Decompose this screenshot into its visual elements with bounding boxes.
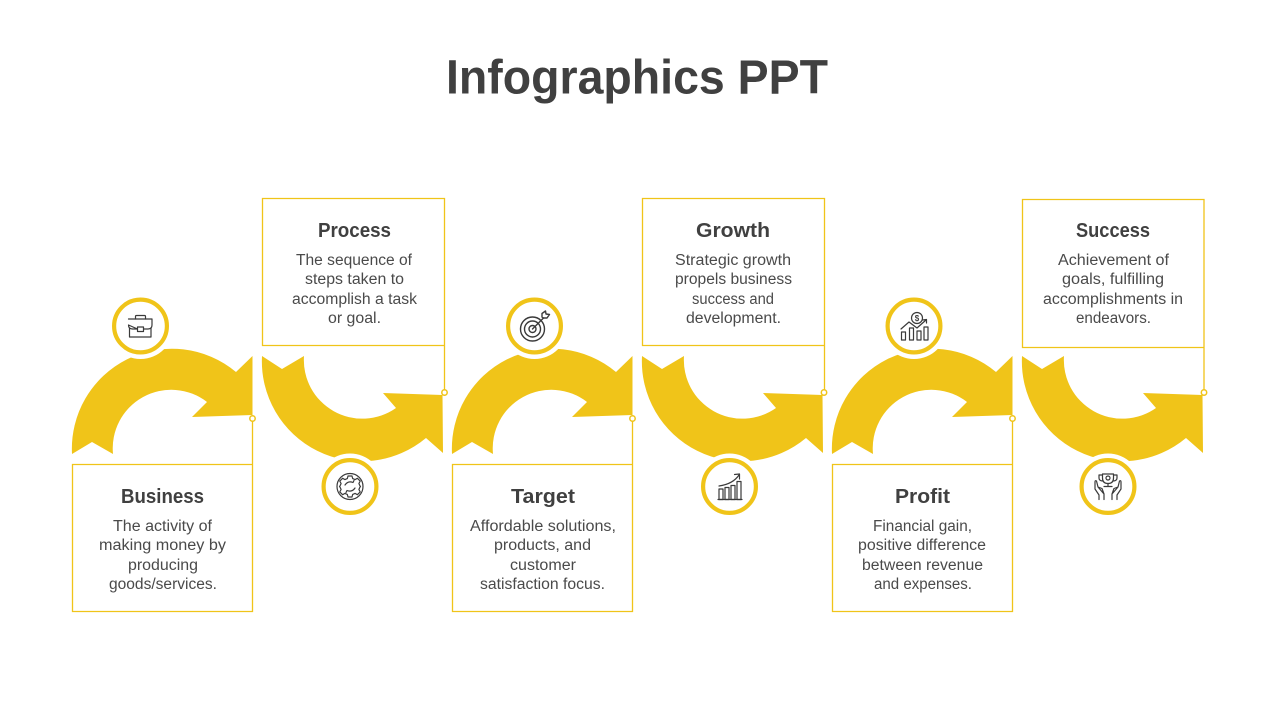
box with connector <box>72 418 252 612</box>
arrow: step 4 <box>642 356 823 461</box>
box with connector <box>452 418 632 612</box>
body text: customer <box>510 557 576 574</box>
body text: Strategic growth <box>675 252 791 269</box>
body text: development. <box>686 310 781 327</box>
body text: goods/services. <box>109 576 217 593</box>
body text: satisfaction focus. <box>480 576 605 593</box>
body text: between revenue <box>862 557 983 574</box>
icon: target <box>502 293 568 359</box>
body text: The activity of <box>113 518 213 535</box>
connector dot <box>442 390 447 395</box>
icon: hands with trophy <box>1075 454 1141 520</box>
heading: Process <box>318 220 391 242</box>
icon: profit chart: $ <box>915 314 920 323</box>
heading: Business <box>121 486 204 508</box>
connector dot <box>1201 390 1207 395</box>
arrow: step 1 <box>72 349 253 454</box>
connector dot <box>1010 416 1015 421</box>
body text: Financial gain, <box>873 518 972 535</box>
panel: Success <box>1022 200 1207 395</box>
icon: growth chart <box>696 454 762 520</box>
icon: profit chart <box>881 293 947 359</box>
connector dot <box>821 390 827 395</box>
box with connector <box>642 198 824 392</box>
body text <box>292 252 417 327</box>
body text: endeavors. <box>1076 310 1151 327</box>
heading: Profit <box>895 486 950 508</box>
box with connector <box>1022 200 1204 392</box>
panel: Business <box>72 416 255 612</box>
body text: The sequence of <box>296 252 413 269</box>
arrow: step 2 <box>262 356 443 461</box>
connector dot <box>250 416 255 421</box>
arrow: step 5 <box>832 349 1012 454</box>
body text <box>858 518 986 593</box>
panel: Growth <box>642 198 827 395</box>
heading: Growth <box>696 220 770 242</box>
body text: making money by <box>99 537 226 554</box>
heading: Success <box>1076 220 1150 242</box>
body text: Achievement of <box>1058 252 1170 269</box>
body text: success and <box>692 291 774 308</box>
body text: accomplishments in <box>1043 291 1183 308</box>
panel: Process <box>262 198 447 395</box>
body text: and expenses. <box>874 576 972 593</box>
body text: propels business <box>675 271 792 288</box>
body text: accomplish a task <box>292 291 417 308</box>
title: Infographics PPT <box>446 52 828 104</box>
arrow: step 3 <box>452 349 632 454</box>
panel: Target <box>452 416 635 612</box>
body text: positive difference <box>858 537 986 554</box>
panel: Profit <box>832 416 1015 612</box>
body text: producing <box>128 557 198 574</box>
box with connector <box>832 418 1012 612</box>
body text <box>470 518 616 593</box>
body text: or goal. <box>328 310 381 327</box>
body text <box>675 252 792 327</box>
body text: Affordable solutions, <box>470 518 616 535</box>
body text <box>1043 252 1183 327</box>
heading: Target <box>511 486 575 508</box>
body text: goals, fulfilling <box>1062 271 1164 288</box>
box with connector <box>262 198 444 392</box>
arrow: step 6 <box>1022 356 1203 461</box>
body text: products, and <box>494 537 591 554</box>
body text <box>99 518 226 593</box>
connector dot <box>630 416 635 421</box>
icon: gear <box>317 454 383 520</box>
body text: steps taken to <box>305 271 404 288</box>
icon: briefcase <box>108 293 174 359</box>
